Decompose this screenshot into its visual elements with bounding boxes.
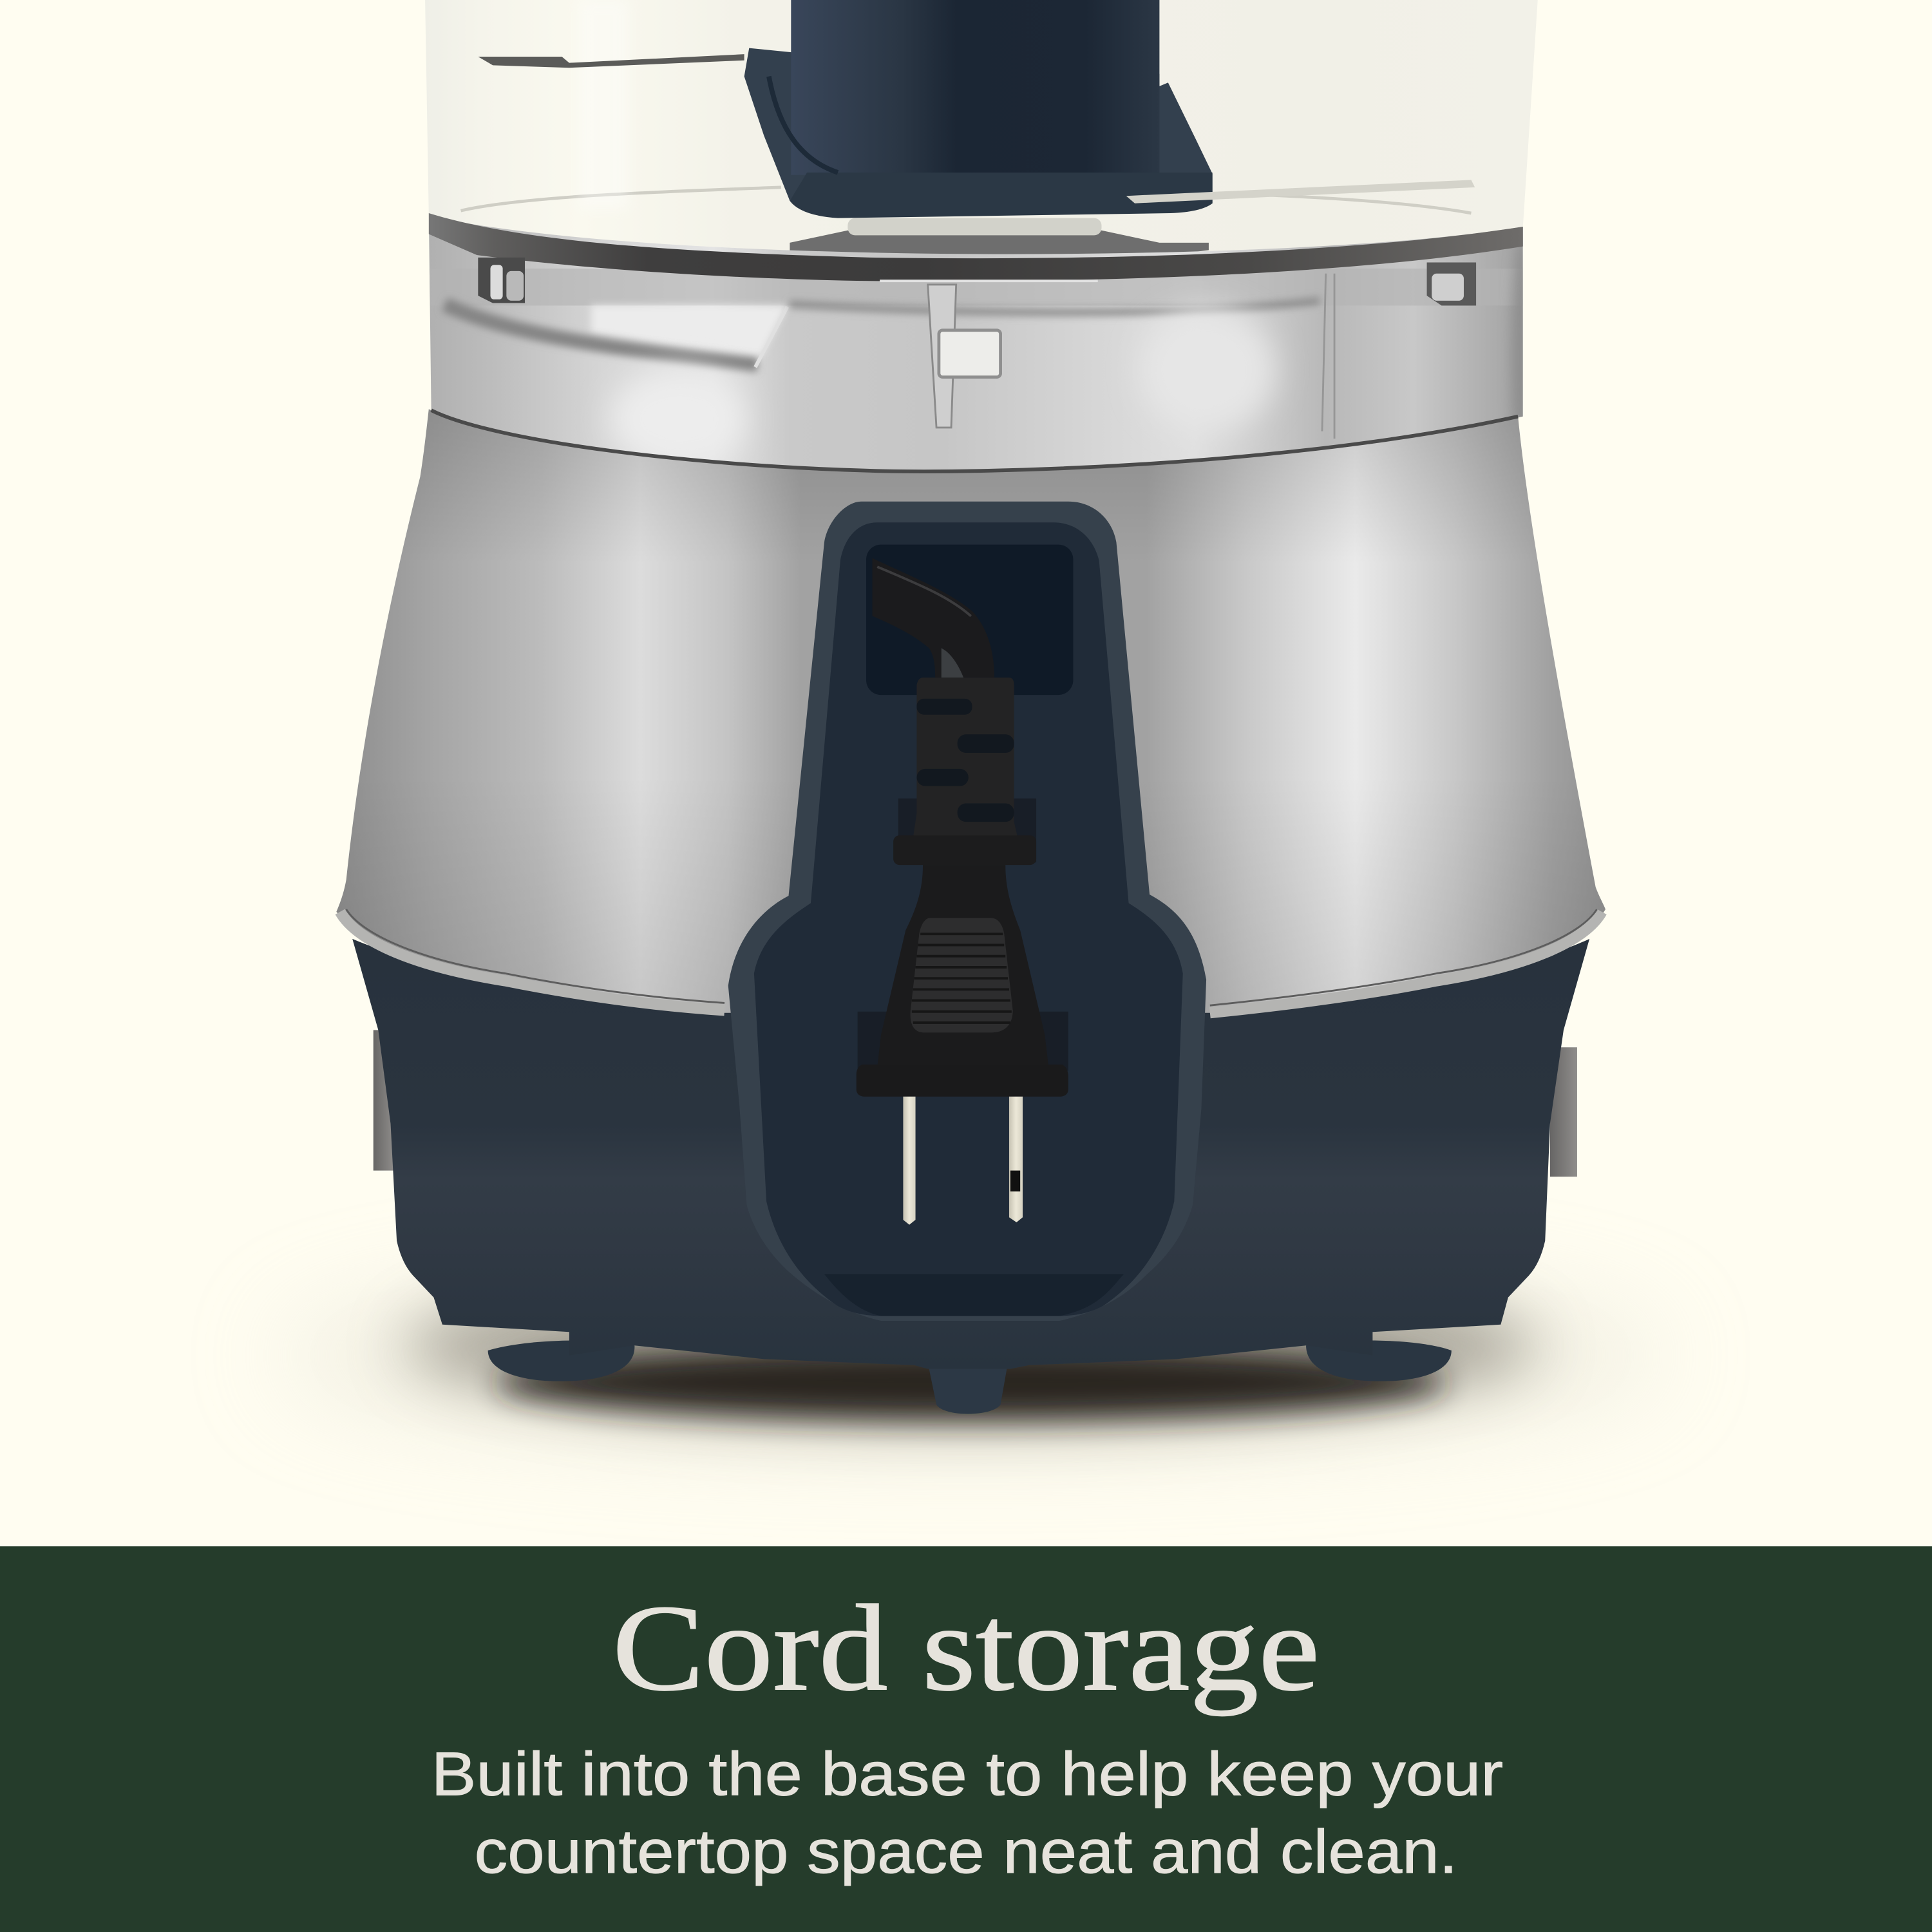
strain relief slits (916, 699, 1014, 822)
strain relief (913, 677, 1018, 838)
body line 2: countertop space neat and clean. (475, 1817, 1457, 1886)
collar tab: left (478, 258, 525, 303)
countertop shadow (281, 1269, 1661, 1442)
blade hub (790, 218, 1209, 255)
compartment recess (754, 522, 1183, 1316)
clear bowl (425, 0, 1538, 254)
heading: Cord storage (612, 1580, 1320, 1716)
dark base (352, 939, 1589, 1369)
pad ribs (912, 934, 1012, 1023)
cord window (866, 545, 1073, 695)
plug body (877, 865, 1048, 1067)
caption band (0, 1546, 1932, 1932)
bowl collar (429, 209, 1534, 480)
bowl dark rim (429, 213, 1523, 281)
food processor (336, 0, 1605, 1414)
plug shadows (858, 799, 1068, 1071)
collar trim line (880, 280, 1098, 281)
plug collar (893, 835, 1036, 865)
plug base plate (857, 1065, 1068, 1097)
housing top seam (431, 410, 1518, 471)
plug (857, 677, 1068, 1225)
right blade (1126, 180, 1475, 204)
left prong (903, 1097, 916, 1225)
collar seam (1322, 274, 1334, 439)
compartment trim (728, 502, 1206, 1321)
collar slot mark (928, 285, 1001, 428)
side tabs (374, 1030, 1577, 1177)
silver motor housing (336, 409, 1605, 1023)
chrome trim (340, 909, 1602, 1013)
collar tab: right (1427, 263, 1476, 305)
cord compartment (728, 502, 1206, 1321)
left blade (478, 54, 744, 68)
power cord (873, 558, 994, 677)
ribbed pad (911, 918, 1013, 1032)
prong hole (1010, 1171, 1020, 1191)
feet (488, 1340, 1452, 1414)
body line 1: Built into the base to help keep your (431, 1740, 1503, 1809)
lower opening (824, 1274, 1124, 1316)
right prong (1009, 1097, 1023, 1222)
blade assembly (744, 0, 1213, 218)
